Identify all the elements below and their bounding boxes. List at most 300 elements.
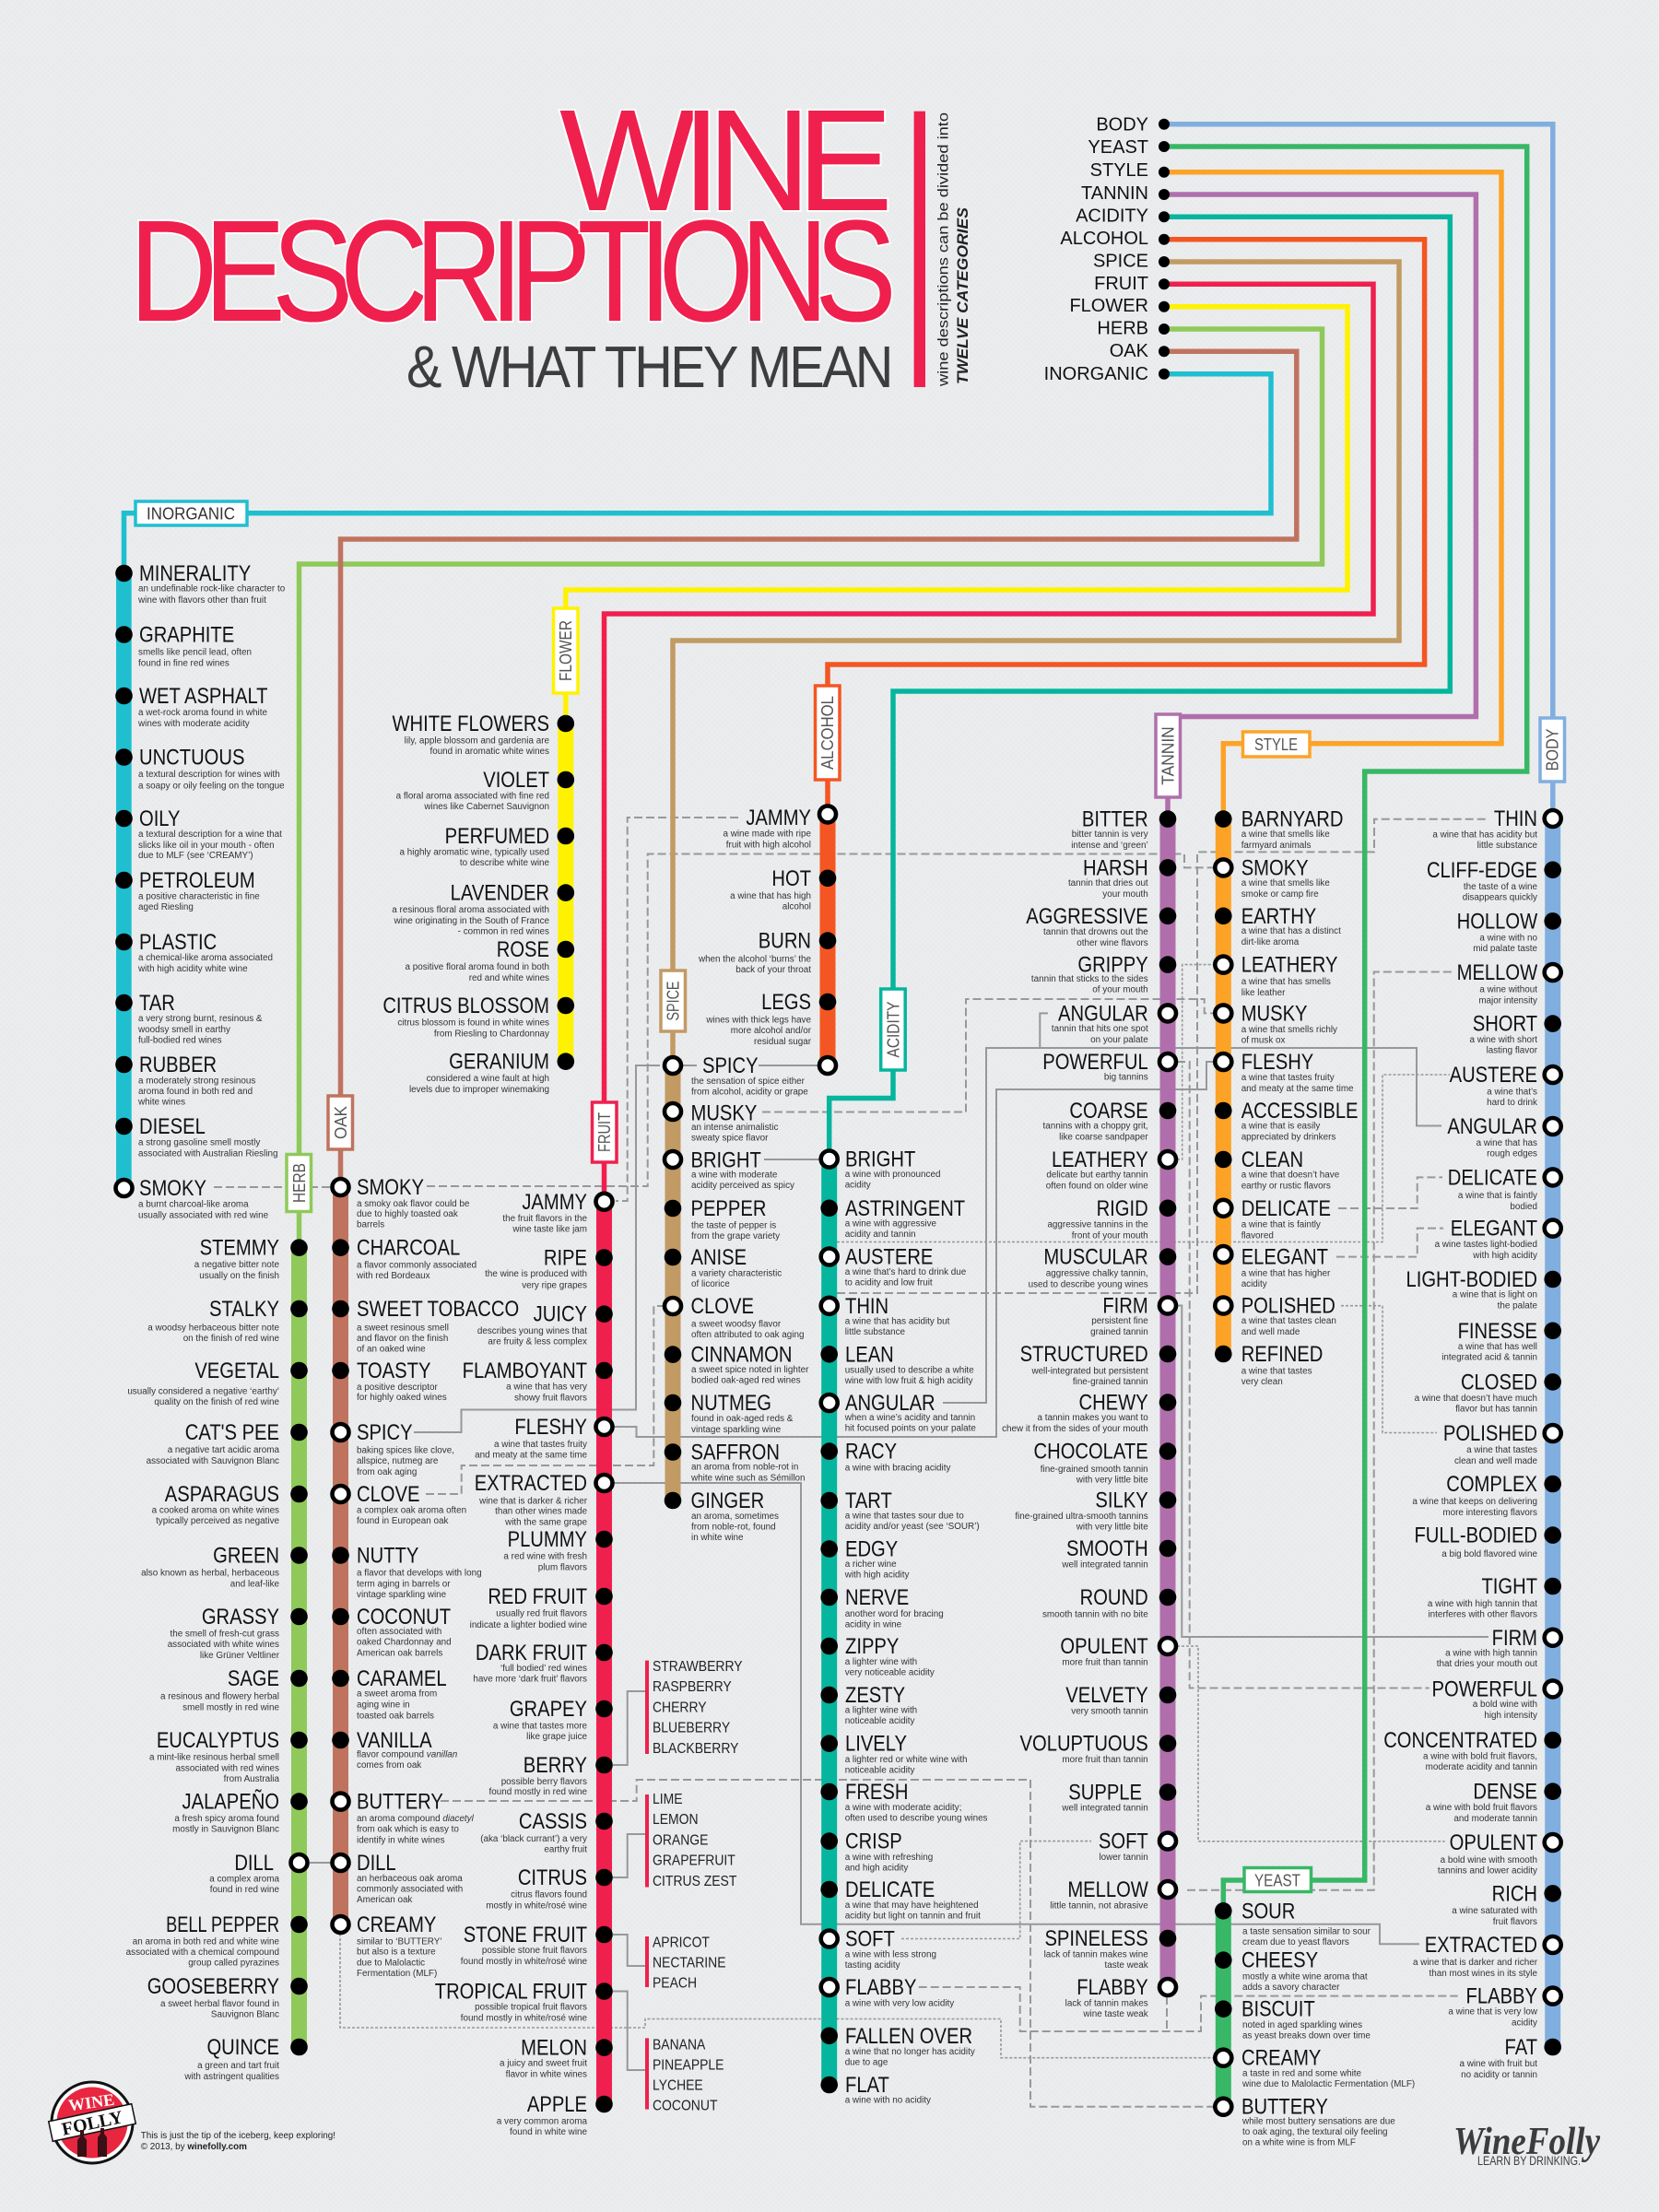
term: structured: STRUCTURED bbox=[1020, 1341, 1148, 1366]
term: eucalyptus: a mint-like resinous herbal smell bbox=[149, 1753, 279, 1763]
term: opulent: tannins and lower acidity bbox=[1438, 1865, 1537, 1877]
term: charcoal: CHARCOAL bbox=[357, 1235, 460, 1260]
term: smoky: usually associated with red wine bbox=[138, 1211, 269, 1220]
term: plummy: a red wine with fresh bbox=[503, 1552, 587, 1561]
term: leathery: LEATHERY bbox=[1241, 952, 1337, 977]
term: legs: residual sugar bbox=[754, 1037, 812, 1047]
term: angular bbox=[1052, 1001, 1176, 1045]
term: cat's pee: associated with Sauvignon Blanc bbox=[147, 1456, 279, 1466]
term: accessible bbox=[1215, 1098, 1359, 1143]
term: flabby: a wine that is very low bbox=[1448, 2007, 1538, 2017]
term: bell pepper: an aroma in both red and white wine bbox=[133, 1937, 280, 1947]
term: nutty: term aging in barrels or bbox=[357, 1580, 451, 1589]
term: leathery: like leather bbox=[1241, 988, 1286, 998]
term: austere: to acidity and low fruit bbox=[845, 1277, 933, 1288]
term: spicy: allspice, nutmeg are bbox=[357, 1456, 439, 1466]
term: anise: of licorice bbox=[691, 1279, 730, 1289]
term: astringent: acidity and tannin bbox=[845, 1230, 916, 1240]
term: jammy: fruit with high alcohol bbox=[726, 841, 811, 850]
term: charcoal: a flavor commonly associated bbox=[357, 1261, 477, 1270]
term: buttery: an aroma compound diacetyl bbox=[357, 1814, 475, 1824]
term: short: a wine with short bbox=[1469, 1035, 1537, 1045]
term: red fruit: RED FRUIT bbox=[488, 1583, 587, 1608]
term: short: SHORT bbox=[1473, 1011, 1537, 1036]
spice label bbox=[661, 971, 686, 1031]
term: dill: DILL bbox=[357, 1850, 396, 1875]
term: bitter: BITTER bbox=[1082, 806, 1148, 831]
term: wet asphalt bbox=[115, 683, 268, 729]
term: soft: SOFT bbox=[845, 1926, 895, 1951]
term: grapey bbox=[493, 1696, 613, 1742]
term: voluptuous: VOLUPTUOUS bbox=[1020, 1731, 1148, 1756]
term: jammy: the fruit flavors in the bbox=[502, 1214, 587, 1224]
connector: spicy oak to spice bbox=[414, 1065, 660, 1432]
tannin label: TANNIN bbox=[1159, 726, 1178, 785]
term: spicy stop bbox=[819, 1057, 836, 1074]
term: pepper: PEPPER bbox=[691, 1195, 766, 1220]
term: firm: grained tannin bbox=[1090, 1327, 1148, 1337]
connector: fleshy bbox=[613, 1062, 1213, 1437]
panel: alcohol bbox=[698, 240, 1425, 1074]
term: sweet tobacco: of an oaked wine bbox=[357, 1344, 426, 1355]
term: vegetal: VEGETAL bbox=[194, 1358, 279, 1382]
term: sour: cream due to yeast flavors bbox=[1242, 1937, 1349, 1947]
list: citrus: LIME bbox=[653, 1792, 683, 1807]
term: white flowers: found in aromatic white wines bbox=[429, 747, 549, 757]
term: tropical fruit bbox=[435, 1979, 613, 2024]
term: coconut bbox=[332, 1604, 452, 1659]
term: toasty: a positive descriptor bbox=[357, 1382, 439, 1393]
term: elegant: ELEGANT bbox=[1451, 1216, 1537, 1241]
term: stalky bbox=[147, 1296, 308, 1344]
term: barnyard: farmyard animals bbox=[1241, 841, 1311, 851]
term: caramel: toasted oak barrels bbox=[357, 1712, 434, 1722]
term: buttery: on a white wine is from MLF bbox=[1242, 2138, 1356, 2147]
footer note: © 2013, by winefolly.com bbox=[141, 2142, 247, 2152]
term: sweet tobacco bbox=[332, 1296, 519, 1355]
term: tar: full-bodied red wines bbox=[138, 1036, 222, 1045]
term: cliff-edge: CLIFF-EDGE bbox=[1427, 857, 1537, 882]
term: barnyard bbox=[1215, 806, 1343, 851]
term: edgy: a richer wine bbox=[845, 1559, 897, 1570]
style line bbox=[1164, 172, 1501, 819]
term: tight: a wine with high tannin that bbox=[1428, 1599, 1537, 1609]
term: stone fruit bbox=[461, 1922, 613, 1967]
term: petroleum: PETROLEUM bbox=[139, 867, 255, 892]
term: wet asphalt: WET ASPHALT bbox=[139, 683, 268, 708]
term: dill: commonly associated with bbox=[357, 1884, 463, 1895]
term: lively bbox=[820, 1731, 968, 1775]
term: coarse: COARSE bbox=[1069, 1098, 1148, 1123]
term: plummy: PLUMMY bbox=[508, 1526, 587, 1551]
term: chocolate bbox=[1034, 1439, 1176, 1486]
term: cliff-edge bbox=[1427, 857, 1561, 903]
legend: twelve categories bbox=[1044, 115, 1170, 384]
term: nutty: vintage sparkling wine bbox=[357, 1590, 447, 1600]
term: smoky: SMOKY bbox=[357, 1174, 424, 1199]
term: sage: a resinous and flowery herbal bbox=[160, 1692, 279, 1701]
term: mellow: MELLOW bbox=[1067, 1877, 1149, 1901]
term: clove: a complex oak aroma often bbox=[357, 1506, 466, 1516]
term: concentrated bbox=[1383, 1727, 1561, 1772]
term: crisp: a wine with refreshing bbox=[845, 1853, 933, 1863]
term: flabby: acidity bbox=[1512, 2018, 1537, 2028]
term: grassy: GRASSY bbox=[202, 1604, 279, 1629]
term: oily bbox=[115, 806, 282, 861]
term: spicy: baking spices like clove, bbox=[357, 1445, 454, 1456]
term: smoky: a burnt charcoal-like aroma bbox=[138, 1200, 249, 1209]
logo: wine folly badge bbox=[49, 2082, 135, 2163]
term: earthy: a wine that has a distinct bbox=[1241, 926, 1341, 936]
term: opulent bbox=[1060, 1633, 1176, 1668]
term: unctuous bbox=[115, 745, 285, 791]
term: plummy bbox=[503, 1526, 613, 1572]
term: smoky: a smoky oak flavor could be bbox=[357, 1199, 470, 1209]
list: stone fruit bbox=[645, 1936, 726, 1992]
panel: yeast bbox=[1164, 147, 1527, 2147]
term: dill: found in red wine bbox=[210, 1885, 279, 1895]
side note bbox=[936, 112, 971, 387]
term: leathery bbox=[1215, 952, 1337, 998]
term: sage: smell mostly in red wine bbox=[182, 1703, 279, 1712]
term: tight bbox=[1428, 1573, 1561, 1620]
term: ginger: an aroma, sometimes bbox=[691, 1512, 779, 1522]
connector lines between shared words bbox=[214, 818, 1488, 2107]
yeast label: YEAST bbox=[1254, 1871, 1300, 1889]
term: thin: little substance bbox=[845, 1327, 906, 1337]
term: nutmeg bbox=[665, 1390, 794, 1435]
term: fallen over: a wine that no longer has acidity bbox=[845, 2047, 975, 2057]
term: green: GREEN bbox=[213, 1543, 279, 1568]
term: gooseberry: GOOSEBERRY bbox=[147, 1973, 279, 1998]
term: quince: a green and tart fruit bbox=[197, 2061, 279, 2071]
term: clove: often attributed to oak aging bbox=[691, 1330, 804, 1340]
term: flabby: a wine with very low acidity bbox=[845, 1998, 954, 2009]
term: sour: SOUR bbox=[1241, 1898, 1295, 1924]
term: jammy: a wine made with ripe bbox=[723, 830, 811, 839]
panel: fruit bbox=[435, 284, 1373, 2137]
term: citrus: citrus flavors found bbox=[511, 1889, 587, 1900]
term: flat bbox=[820, 2072, 931, 2105]
term: nerve: another word for bracing bbox=[845, 1609, 944, 1619]
term: smoky: SMOKY bbox=[139, 1175, 206, 1200]
term: caramel: aging wine in bbox=[357, 1700, 410, 1711]
term: biscuit bbox=[1215, 1996, 1371, 2041]
term: smooth: SMOOTH bbox=[1066, 1535, 1148, 1560]
term: spicy bbox=[332, 1419, 454, 1477]
term: spicy bbox=[665, 1053, 808, 1097]
term: thin: THIN bbox=[845, 1293, 888, 1318]
term: sage bbox=[160, 1665, 308, 1712]
yeast label bbox=[1244, 1867, 1311, 1891]
term: violet: a floral aroma associated with fine red bbox=[396, 791, 549, 802]
term: grippy: of your mouth bbox=[1092, 984, 1148, 995]
term: extracted bbox=[1413, 1932, 1561, 1979]
term: barnyard: a wine that smells like bbox=[1241, 830, 1330, 840]
term: elegant: a wine that has higher bbox=[1241, 1268, 1331, 1279]
term: biscuit: BISCUIT bbox=[1241, 1996, 1315, 2021]
term: soft bbox=[1099, 1829, 1176, 1863]
term: spicy: from oak aging bbox=[357, 1467, 417, 1477]
term: light-bodied bbox=[1406, 1266, 1561, 1311]
term: flabby: FLABBY bbox=[1077, 1974, 1148, 1999]
list: citrus: GRAPEFRUIT bbox=[653, 1853, 735, 1869]
term: rigid: front of your mouth bbox=[1072, 1231, 1148, 1241]
term: finesse: a wine that has well bbox=[1458, 1342, 1537, 1352]
term: burn bbox=[698, 928, 836, 975]
term: coconut: often associated with bbox=[357, 1627, 441, 1637]
term: sweet tobacco: a sweet resinous smell bbox=[357, 1324, 449, 1333]
term: silky: fine-grained ultra-smooth tannins bbox=[1015, 1512, 1148, 1522]
term: harsh: tannin that dries out bbox=[1068, 878, 1148, 888]
term: cheesy: CHEESY bbox=[1241, 1947, 1318, 1972]
herb bar bbox=[291, 1248, 307, 2047]
term: delicate bbox=[820, 1877, 981, 1921]
term: rigid bbox=[1047, 1195, 1176, 1241]
term: citrus: mostly in white/rosé wine bbox=[486, 1900, 588, 1911]
term: rose: red and white wines bbox=[469, 973, 549, 983]
yeast line bbox=[1164, 147, 1527, 1911]
term: geranium: levels due to improper winemaking bbox=[409, 1085, 549, 1095]
term: full-bodied bbox=[1414, 1523, 1561, 1559]
term: clean: a wine that doesn’t have bbox=[1241, 1171, 1340, 1180]
term: rose: a positive floral aroma found in both bbox=[406, 962, 549, 972]
term: powerful: POWERFUL bbox=[1042, 1049, 1148, 1074]
term: opulent: a bold wine with smooth bbox=[1441, 1855, 1537, 1865]
term: bell pepper bbox=[126, 1912, 308, 1969]
term: supple: well integrated tannin bbox=[1061, 1803, 1148, 1814]
term: zippy: a lighter wine with bbox=[845, 1657, 917, 1667]
term: extracted: EXTRACTED bbox=[475, 1470, 587, 1495]
term: dense: DENSE bbox=[1473, 1779, 1537, 1804]
term: buttery bbox=[1215, 2094, 1395, 2147]
term: spineless bbox=[1044, 1925, 1176, 1971]
term: finesse: FINESSE bbox=[1458, 1318, 1537, 1343]
term: opulent: more fruit than tannin bbox=[1062, 1657, 1148, 1668]
term: cheesy: adds a savory character bbox=[1242, 1983, 1340, 1993]
term: stemmy: usually on the finish bbox=[199, 1271, 279, 1281]
term: bright: BRIGHT bbox=[845, 1147, 916, 1171]
term: bitter bbox=[1071, 806, 1176, 851]
term: ginger: GINGER bbox=[691, 1488, 764, 1512]
term: cassis: earthy fruit bbox=[544, 1845, 587, 1855]
term: extracted: with the same grape bbox=[504, 1517, 587, 1528]
term: caramel bbox=[332, 1665, 447, 1722]
term: apple: found in white wine bbox=[510, 2127, 587, 2137]
connector: soft bbox=[901, 1841, 1091, 1939]
term: tart: a wine that tastes sour due to bbox=[845, 1512, 964, 1521]
term: graphite: GRAPHITE bbox=[139, 622, 234, 647]
list: berries bbox=[645, 1659, 743, 1757]
term: cheesy bbox=[1215, 1947, 1368, 1993]
term: red fruit bbox=[470, 1583, 613, 1630]
term: powerful: big tannins bbox=[1104, 1073, 1148, 1082]
connector: angular tannin bbox=[1040, 1013, 1048, 1048]
term: finesse bbox=[1441, 1318, 1561, 1362]
term: supple: SUPPLE bbox=[1068, 1780, 1142, 1805]
term: fat: FAT bbox=[1505, 2034, 1537, 2059]
term: soft: SOFT bbox=[1099, 1829, 1148, 1853]
term: flabby bbox=[821, 1974, 954, 2009]
term: refined: very clean bbox=[1241, 1377, 1283, 1387]
term: closed bbox=[1415, 1370, 1561, 1414]
term: harsh: HARSH bbox=[1083, 855, 1148, 880]
term: soft: a wine with less strong bbox=[845, 1950, 936, 1959]
term: angular: on your palate bbox=[1090, 1035, 1148, 1045]
term: firm: persistent fine bbox=[1091, 1316, 1148, 1326]
term: cinnamon: bodied oak-aged red wines bbox=[691, 1376, 801, 1386]
term: ripe bbox=[485, 1245, 613, 1290]
panel: style bbox=[1164, 172, 1501, 1387]
term: green: and leaf-like bbox=[230, 1580, 280, 1589]
term: fleshy: FLESHY bbox=[1241, 1049, 1313, 1074]
inorganic label bbox=[135, 501, 247, 525]
term: hot: alcohol bbox=[782, 901, 811, 912]
term: vegetal bbox=[127, 1358, 308, 1407]
term: musky: MUSKY bbox=[691, 1100, 757, 1125]
connector: spicy spice to alcohol bbox=[683, 1065, 818, 1066]
panel: tannin bbox=[1002, 194, 1476, 2019]
connector: mellow bbox=[1187, 971, 1452, 1890]
term: buttery: BUTTERY bbox=[357, 1789, 443, 1814]
term: smoky: SMOKY bbox=[1241, 855, 1309, 880]
term: apple bbox=[497, 2091, 613, 2137]
term: jammy: JAMMY bbox=[522, 1189, 587, 1214]
term: silky: SILKY bbox=[1095, 1488, 1148, 1512]
term: powerful: POWERFUL bbox=[1432, 1677, 1537, 1701]
term: muscular: aggressive chalky tannin, bbox=[1046, 1268, 1148, 1279]
term: plastic: a chemical-like aroma associated bbox=[138, 953, 273, 963]
term: jammy: wine taste like jam bbox=[512, 1224, 587, 1235]
term: full-bodied: a big bold flavored wine bbox=[1441, 1549, 1537, 1559]
term: juicy: JUICY bbox=[534, 1301, 587, 1326]
term: grapey: GRAPEY bbox=[510, 1696, 587, 1721]
term: edgy bbox=[820, 1536, 909, 1580]
term: anise: ANISE bbox=[691, 1244, 747, 1269]
term: smoky bbox=[1215, 855, 1330, 900]
list: stone fruit: NECTARINE bbox=[653, 1956, 726, 1971]
term: white flowers: lily, apple blossom and gardenia are bbox=[405, 735, 549, 747]
term: violet bbox=[396, 767, 574, 812]
term: minerality bbox=[115, 560, 286, 606]
term: thin bbox=[821, 1293, 950, 1337]
term: rich: a wine saturated with bbox=[1452, 1906, 1537, 1916]
term: dark fruit: ‘full bodied’ red wines bbox=[500, 1664, 587, 1674]
term: tart: acidity and/or yeast (see ‘SOUR’) bbox=[845, 1522, 980, 1532]
term: austere: a wine that’s hard to drink due bbox=[845, 1267, 967, 1277]
term: lean: usually used to describe a white bbox=[845, 1366, 974, 1375]
tannin label bbox=[1156, 714, 1180, 797]
connector: creamy bbox=[340, 1934, 1213, 2058]
term: aggressive: tannin that drowns out the bbox=[1043, 927, 1148, 937]
term: firm bbox=[1090, 1293, 1176, 1337]
term: velvety: VELVETY bbox=[1065, 1682, 1148, 1707]
term: smoky: a wine that smells like bbox=[1241, 878, 1330, 888]
term: spineless: taste weak bbox=[1104, 1960, 1148, 1971]
term: juicy bbox=[477, 1301, 613, 1347]
term: polished: POLISHED bbox=[1443, 1420, 1537, 1445]
term: spicy: SPICY bbox=[702, 1053, 759, 1077]
term: bright: a wine with pronounced bbox=[845, 1170, 940, 1180]
term: quince: with astringent qualities bbox=[183, 2072, 279, 2082]
term: cinnamon bbox=[665, 1342, 809, 1386]
term: extracted: wine that is darker & richer bbox=[478, 1497, 588, 1506]
term: austere: AUSTERE bbox=[845, 1244, 933, 1269]
term: plastic bbox=[115, 929, 273, 974]
list: tropical fruit bbox=[645, 2038, 724, 2114]
term: muscular: MUSCULAR bbox=[1043, 1244, 1148, 1269]
list: berries: BLACKBERRY bbox=[653, 1741, 739, 1757]
term: smoky: due to highly toasted oak bbox=[357, 1209, 458, 1219]
term: elegant bbox=[1435, 1216, 1561, 1261]
list: citrus: ORANGE bbox=[653, 1833, 709, 1849]
term: aggressive: AGGRESSIVE bbox=[1026, 903, 1148, 928]
term: asparagus: a cooked aroma on white wines bbox=[152, 1506, 279, 1516]
term: dill bbox=[332, 1850, 463, 1905]
oak line bbox=[341, 351, 1297, 1187]
term: astringent: a wine with aggressive bbox=[845, 1218, 937, 1229]
term: extracted: than most wines in its style bbox=[1430, 1969, 1538, 1979]
term: fallen over bbox=[820, 2023, 975, 2068]
term: buttery: BUTTERY bbox=[1241, 2094, 1328, 2119]
term: earthy: EARTHY bbox=[1241, 903, 1316, 928]
term: bell pepper: BELL PEPPER bbox=[166, 1912, 279, 1936]
term: hollow: a wine with no bbox=[1479, 933, 1538, 944]
herb line bbox=[299, 329, 1322, 1248]
term: soft: lower tannin bbox=[1099, 1853, 1148, 1863]
term: cat's pee bbox=[147, 1419, 308, 1466]
term: earthy: dirt-like aroma bbox=[1241, 937, 1300, 947]
term: musky: a wine that smells richly bbox=[1241, 1025, 1337, 1035]
herb label: HERB bbox=[290, 1163, 309, 1203]
term: complex bbox=[1412, 1471, 1561, 1518]
term: fat: no acidity or tannin bbox=[1461, 2070, 1537, 2080]
term: voluptuous bbox=[1020, 1731, 1176, 1765]
term: bitter: bitter tannin is very bbox=[1072, 830, 1148, 840]
term: musky: sweaty spice flavor bbox=[691, 1134, 769, 1143]
term: accessible: a wine that is easily bbox=[1241, 1121, 1320, 1132]
term: jalapeño: mostly in Sauvignon Blanc bbox=[172, 1825, 279, 1834]
term: tropical fruit: found mostly in white/rosé wine bbox=[461, 2013, 588, 2024]
term: musky bbox=[1215, 1001, 1337, 1045]
term: saffron bbox=[665, 1440, 806, 1483]
term: thin: THIN bbox=[1494, 806, 1537, 830]
term: full-bodied: FULL-BODIED bbox=[1414, 1523, 1537, 1547]
term: accessible: appreciated by drinkers bbox=[1241, 1132, 1335, 1143]
term: cassis bbox=[480, 1808, 613, 1855]
term: smoky: barrels bbox=[357, 1220, 384, 1230]
acidity label: ACIDITY bbox=[885, 1001, 903, 1058]
term: nutmeg: vintage sparkling wine bbox=[691, 1425, 782, 1435]
term: grassy: the smell of fresh-cut grass bbox=[170, 1630, 279, 1640]
list: berries: BLUEBERRY bbox=[653, 1721, 730, 1736]
term: jalapeño: JALAPEÑO bbox=[182, 1789, 279, 1814]
term: extracted: than other wines made bbox=[495, 1507, 587, 1517]
term: tart bbox=[820, 1488, 980, 1532]
term: legs: LEGS bbox=[761, 989, 811, 1014]
flower label bbox=[553, 608, 578, 693]
term: aggressive bbox=[1026, 903, 1176, 948]
fruit line bbox=[605, 284, 1373, 1202]
term: chocolate: with very little bite bbox=[1076, 1476, 1148, 1486]
term: citrus blossom: CITRUS BLOSSOM bbox=[382, 993, 549, 1018]
term: closed: flavor but has tannin bbox=[1455, 1405, 1537, 1414]
connector: citrus list bbox=[613, 1834, 645, 1877]
term: creamy: CREAMY bbox=[1241, 2045, 1321, 2070]
term: musky bbox=[665, 1100, 778, 1143]
term: fleshy: and meaty at the same time bbox=[1241, 1084, 1354, 1094]
term: polished: clean and well made bbox=[1454, 1456, 1538, 1466]
